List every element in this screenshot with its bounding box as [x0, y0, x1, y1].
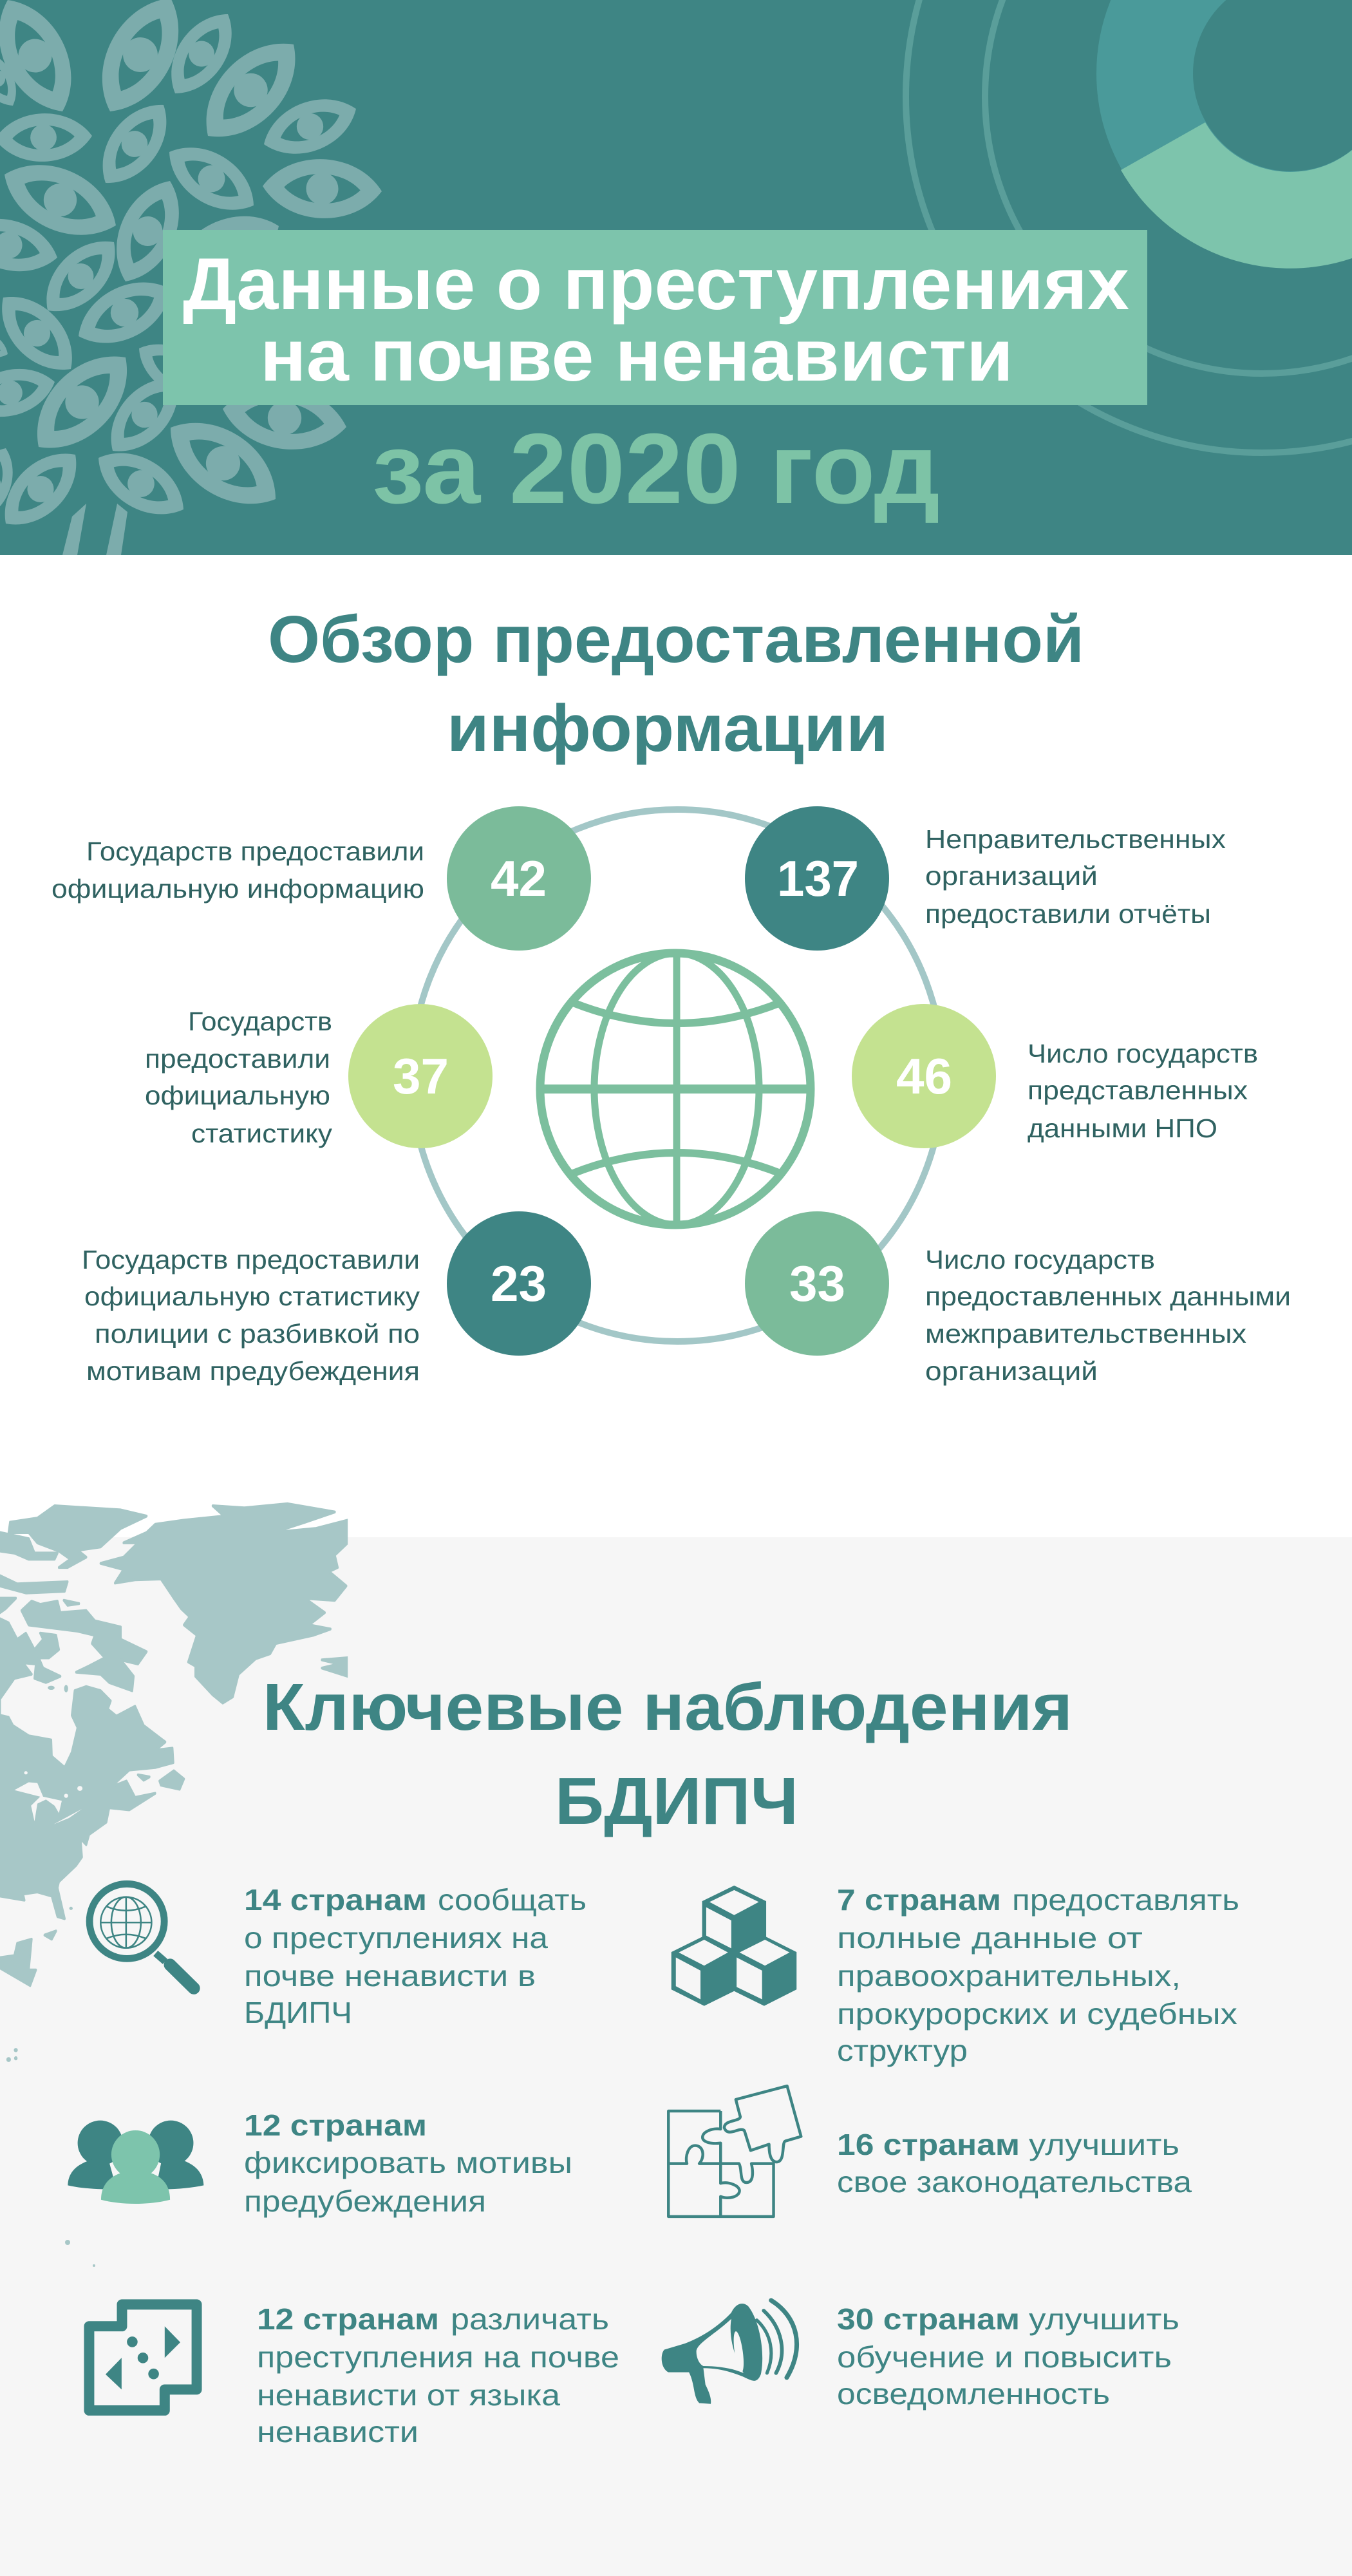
text: преступления на почве [257, 2340, 619, 2374]
label: 33: межправительственных [925, 1319, 1247, 1349]
label: 23: полиции с разбивкой по [95, 1319, 420, 1349]
title box: на почве ненависти [260, 315, 1013, 397]
heading: key observations: Ключевые наблюдения [263, 1670, 1073, 1744]
text: улучшить [1029, 2128, 1179, 2161]
icon: people [68, 2121, 203, 2204]
item: 16 countries [668, 2086, 1192, 2217]
heading: key observations: БДИПЧ [555, 1764, 798, 1838]
text: сообщать [438, 1883, 587, 1917]
text: 30 странам [837, 2302, 1020, 2336]
label: 137: организаций [925, 861, 1098, 891]
stat: 33 [745, 1211, 889, 1356]
map of North America and Greenland [0, 1504, 348, 2062]
text: прокурорских и судебных [837, 1997, 1237, 2031]
text: структур [837, 2034, 968, 2067]
item: 30 countries [662, 2300, 1179, 2410]
stat: 137 [745, 806, 889, 951]
text [244, 1883, 587, 2029]
item: 12 countries motives [68, 2108, 572, 2218]
label: 42 [52, 837, 424, 904]
label: 33: предоставленных данными [925, 1282, 1291, 1311]
text: полные данные от [837, 1921, 1143, 1955]
label: 46: Число государств [1028, 1039, 1258, 1068]
text: предоставлять [1012, 1883, 1239, 1917]
connecting ring [411, 810, 943, 1341]
item: 7 countries [671, 1883, 1239, 2067]
icon: megaphone [662, 2300, 797, 2404]
label: 33: Число государств [925, 1245, 1155, 1274]
label: 46: данными НПО [1028, 1113, 1217, 1143]
item: 12 countries distinguish [89, 2302, 619, 2448]
text: ненависти [257, 2415, 418, 2448]
stat: 37: 37 [393, 1048, 449, 1104]
label: 42: официальную информацию [52, 874, 424, 904]
text: 12 странам [244, 2108, 427, 2142]
text: предубеждения [244, 2184, 486, 2218]
label: 46: представленных [1028, 1075, 1248, 1105]
text: 7 странам [837, 1883, 1001, 1917]
text: почве ненависти в [244, 1959, 536, 1993]
panel: overview diagram [52, 806, 1291, 1386]
label: 137: предоставили отчёты [925, 899, 1211, 929]
stat: 46: 46 [896, 1048, 952, 1104]
text: различать [451, 2302, 609, 2336]
text: БДИПЧ [244, 1996, 352, 2029]
heading: overview: информации [447, 691, 888, 765]
text [257, 2302, 619, 2448]
label: 23: официальную статистику [84, 1282, 420, 1311]
panel: header banner [0, 0, 1352, 555]
label: 37 [145, 1007, 333, 1148]
text: 14 странам [244, 1883, 427, 1917]
text: улучшить [1029, 2302, 1179, 2336]
title box: Данные о преступлениях [183, 243, 1129, 325]
label: 33 [925, 1245, 1291, 1386]
item: 14 countries [89, 1883, 587, 2029]
label: 37: официальную [145, 1081, 330, 1110]
label: 37: Государств [188, 1007, 332, 1036]
stat: 137: 137 [777, 850, 859, 907]
stat: 37 [348, 1004, 493, 1148]
stat: 42: 42 [491, 850, 547, 907]
text: осведомленность [837, 2377, 1110, 2410]
label: 23 [82, 1245, 420, 1386]
donut chart decoration [1121, 0, 1352, 269]
text: правоохранительных, [837, 1959, 1181, 1993]
text [837, 1883, 1239, 2067]
text: ненависти от языка [257, 2378, 560, 2412]
label: 42: Государств предоставили [86, 837, 424, 866]
label: 46 [1028, 1039, 1258, 1143]
icon: puzzle [668, 2086, 801, 2217]
heading: overview [268, 602, 1084, 765]
icon: globe [540, 953, 811, 1225]
icon: diverging arrows map [89, 2304, 197, 2410]
map dots [65, 2240, 95, 2267]
title box [163, 230, 1147, 405]
text: обучение и повысить [837, 2340, 1172, 2374]
stat: 23: 23 [491, 1255, 547, 1312]
label: 37: статистику [191, 1119, 333, 1148]
stat: 46 [852, 1004, 996, 1148]
icon: cubes [671, 1886, 796, 2006]
label: 137 [925, 824, 1226, 929]
text: фиксировать мотивы [244, 2146, 572, 2179]
text: 16 странам [837, 2128, 1020, 2161]
stat: 42 [447, 806, 591, 951]
text: о преступлениях на [244, 1921, 548, 1955]
tree of eyes decoration [0, 0, 383, 555]
label: 37: предоставили [145, 1044, 330, 1074]
text [244, 2108, 572, 2218]
text: 12 странам [257, 2302, 439, 2336]
text [837, 2302, 1179, 2410]
concentric rings [906, 0, 1352, 453]
label: 23: Государств предоставили [82, 1245, 420, 1274]
text: свое законодательства [837, 2165, 1192, 2199]
text [837, 2128, 1192, 2199]
stat: 33: 33 [789, 1255, 845, 1312]
label: 33: организаций [925, 1356, 1098, 1386]
heading: key observations [263, 1670, 1073, 1838]
label: 23: мотивам предубеждения [86, 1356, 420, 1386]
heading: overview: Обзор предоставленной [268, 602, 1084, 676]
icon: magnifier with globe [89, 1884, 194, 1988]
label: 137: Неправительственных [925, 824, 1226, 854]
panel: key observations background [0, 1537, 1352, 2576]
subtitle year: за 2020 год [372, 413, 940, 524]
stat: 23 [447, 1211, 591, 1356]
